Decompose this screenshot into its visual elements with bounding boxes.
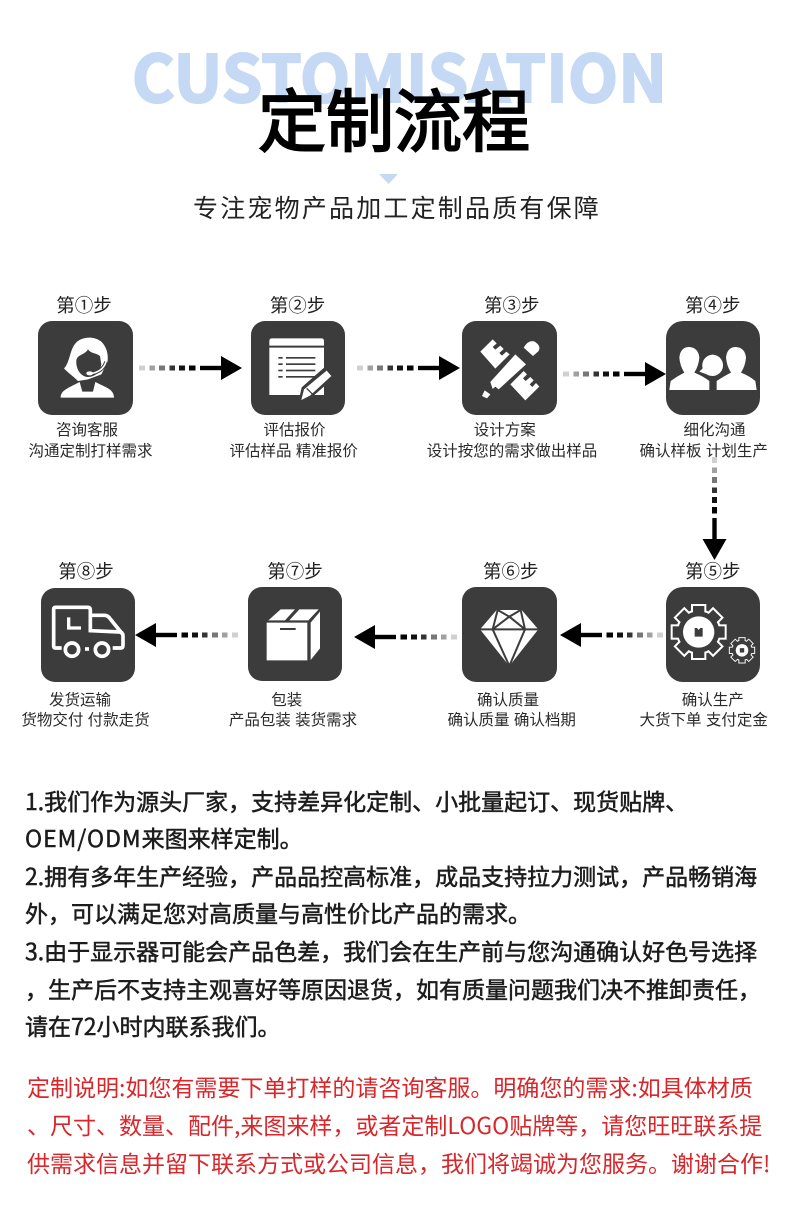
icon: package box	[267, 609, 320, 660]
step 1: 咨询客服	[56, 421, 118, 439]
step 7: 第⑦步	[267, 561, 323, 582]
step 5: 第⑤步	[685, 561, 740, 582]
arrow 4 to 5	[702, 457, 726, 560]
triangle marker	[379, 174, 398, 184]
step 3: 设计方案	[474, 421, 536, 439]
step 7: 产品包装 装货需求	[229, 711, 357, 729]
step 5	[640, 561, 768, 729]
step 6: 确认质量	[477, 691, 539, 709]
step 7	[229, 561, 357, 729]
step 7: 包装	[271, 691, 302, 709]
step 1: 沟通定制打样需求	[28, 442, 153, 460]
arrow 1 to 2	[139, 356, 242, 380]
icon: diamond	[480, 610, 538, 666]
red customisation note: 供需求信息并留下联系方式或公司信息，我们将竭诚为您服务。谢谢合作!	[27, 1145, 770, 1179]
icon: customer service agent	[61, 338, 114, 398]
body text block: 2.拥有多年生产经验，产品品控高标准，成品支持拉力测试，产品畅销海	[25, 858, 757, 892]
subtitle: 专注宠物产品加工定制品质有保障	[193, 195, 601, 223]
step 3: 第③步	[484, 295, 539, 316]
icon: three people talking	[669, 347, 757, 390]
icon: form and pencil	[269, 338, 335, 403]
step 2: 第②步	[270, 295, 325, 316]
red customisation note: 定制说明:如您有需要下单打样的请咨询客服。明确您的需求:如具体材质	[27, 1069, 753, 1103]
arrow 2 to 3	[357, 356, 460, 380]
step 1: 第①步	[56, 295, 112, 316]
body text block: 3.由于显示器可能会产品色差，我们会在生产前与您沟通确认好色号选择	[25, 933, 757, 967]
red customisation note: 、尺寸、数量、配件,来图来样，或者定制LOGO贴牌等，请您旺旺联系提	[27, 1107, 762, 1141]
body text block	[25, 783, 761, 1042]
icon: gears	[673, 606, 754, 663]
arrow 3 to 4	[563, 362, 666, 386]
step 1	[28, 295, 153, 460]
step 6: 第⑥步	[483, 561, 538, 582]
step 8: 发货运输	[49, 691, 111, 709]
background title: CUSTOMISATION: CUSTOMISATION	[132, 27, 667, 121]
body text block: 外，可以满足您对高质量与高性价比产品的需求。	[25, 895, 531, 929]
step 4: 第④步	[685, 295, 740, 316]
step 2: 评估样品 精准报价	[230, 442, 358, 460]
step 8	[21, 561, 150, 729]
step 4: 确认样板 计划生产	[640, 442, 768, 460]
icon: delivery truck	[54, 607, 123, 656]
step 4	[640, 295, 768, 460]
step 6: 确认质量 确认档期	[448, 711, 576, 729]
red customisation note	[27, 1069, 770, 1179]
arrow 7 to 8	[135, 623, 238, 647]
step 6	[448, 561, 576, 729]
body text block: 请在72小时内联系我们。	[25, 1008, 281, 1042]
body text block: ，生产后不支持主观喜好等原因退货，如有质量问题我们决不推卸责任，	[25, 971, 761, 1005]
step 5: 大货下单 支付定金	[640, 711, 768, 729]
icon: ruler and pencil	[480, 339, 539, 400]
step 2: 评估报价	[263, 421, 326, 439]
step 8: 货物交付 付款走货	[21, 711, 150, 729]
step 3	[427, 295, 597, 460]
step 3: 设计按您的需求做出样品	[427, 442, 597, 460]
step 8: 第⑧步	[58, 561, 114, 582]
step 4: 细化沟通	[683, 421, 746, 439]
step 5: 确认生产	[682, 691, 744, 709]
body text block: 1.我们作为源头厂家，支持差异化定制、小批量起订、现货贴牌、	[25, 783, 688, 817]
body text block: OEM/ODM来图来样定制。	[25, 820, 303, 854]
arrow 5 to 6	[560, 623, 663, 647]
step 2	[230, 295, 358, 460]
title: 定制流程	[258, 85, 530, 161]
arrow 6 to 7	[354, 625, 457, 649]
